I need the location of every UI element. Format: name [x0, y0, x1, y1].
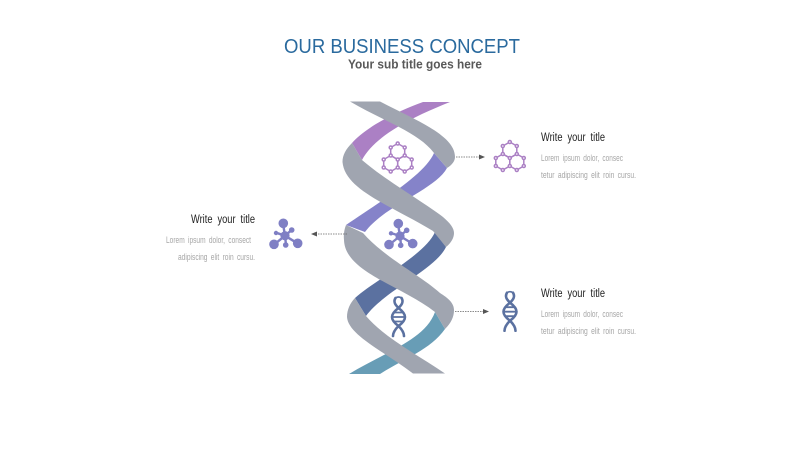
strand: violet: [346, 153, 447, 232]
text block: bottom right: tetur adipiscing elit roin cursu.: [541, 326, 636, 336]
arrow: bottom right: [455, 309, 489, 314]
text block: bottom right: [541, 288, 636, 336]
strand: teal: [349, 312, 445, 374]
text block: top right: tetur adipiscing elit roin cursu.: [541, 170, 636, 180]
strand: gray segment 1: [350, 102, 455, 168]
title: OUR BUSINESS CONCEPT: [284, 36, 520, 58]
strand: gray segment 2: [342, 143, 454, 247]
text block: bottom right: Write your title: [541, 288, 605, 300]
icon: hexagon cluster right: [494, 140, 525, 172]
icon: dna right: [504, 292, 516, 331]
text block: top right: [541, 132, 636, 180]
text block: top right: Lorem ipsum dolor, consec: [541, 153, 623, 163]
strand: gray segment 3: [344, 225, 454, 329]
text block: top right: Write your title: [541, 132, 605, 144]
strand: slate blue: [355, 232, 446, 316]
text block: left: adipiscing elit roin cursu.: [178, 252, 255, 262]
icon: hexagon cluster center: [382, 142, 413, 173]
strand: gray segment 4: [347, 298, 445, 374]
arrow: left: [311, 232, 347, 236]
subtitle: Your sub title goes here: [348, 56, 482, 72]
arrow: top right: [456, 154, 485, 160]
text block: left: Write your title: [191, 214, 255, 226]
icon: molecule center: [384, 219, 418, 249]
text block: left: Lorem ipsum dolor, consect: [166, 235, 251, 245]
strand: purple: [352, 102, 450, 160]
dna helix: [342, 102, 455, 374]
text block: left: [166, 214, 255, 262]
text block: bottom right: Lorem ipsum dolor, consec: [541, 309, 623, 319]
icon: dna center: [392, 297, 405, 336]
icon: molecule left: [269, 218, 302, 249]
